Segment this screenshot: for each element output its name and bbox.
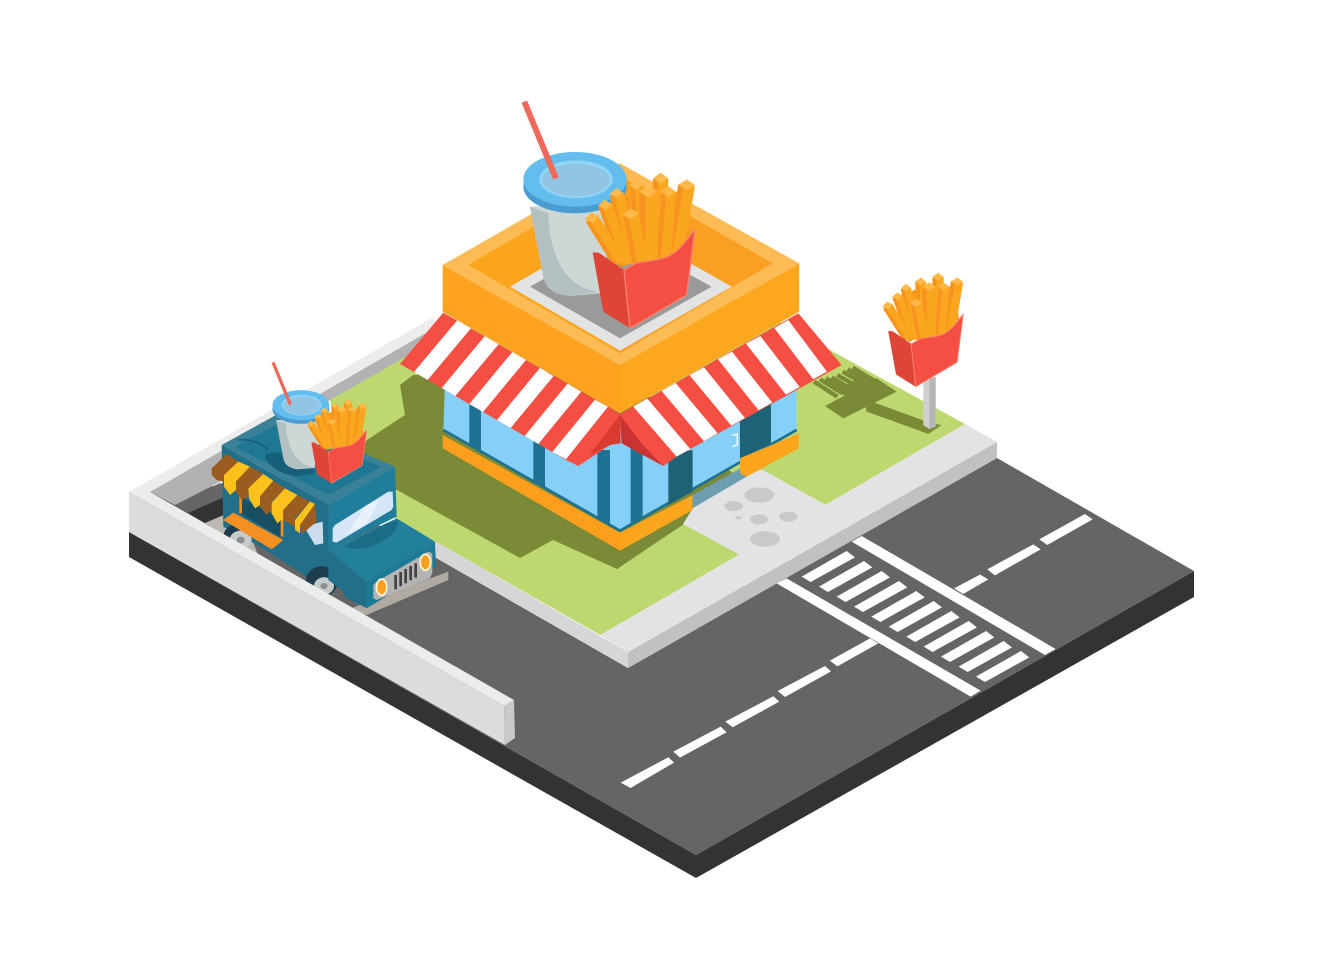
rooftop drink cup — [523, 102, 627, 296]
front wheel — [306, 566, 338, 597]
zebra crossing stripes — [802, 551, 1029, 682]
grass lawn — [330, 235, 965, 635]
right awning — [620, 313, 842, 466]
roof parapet back — [443, 163, 799, 365]
parking pad — [347, 572, 448, 615]
walkway — [683, 470, 826, 555]
back wall — [129, 318, 445, 560]
lot with sidewalk — [400, 424, 997, 668]
stop bars — [777, 536, 1056, 697]
restaurant building — [400, 102, 842, 551]
road markings — [621, 514, 1093, 788]
road base — [129, 458, 1194, 878]
sign pole — [923, 377, 936, 429]
truck awning — [212, 454, 317, 534]
orange base — [443, 433, 799, 551]
fries sign — [814, 273, 963, 434]
sign shadow — [814, 368, 942, 434]
service hatch — [223, 497, 283, 549]
centre line dashes — [621, 514, 1093, 788]
left awning — [400, 313, 621, 466]
parapet front faces — [443, 263, 799, 413]
food truck — [212, 362, 448, 615]
truck hood — [328, 518, 436, 608]
rooftop fries — [585, 173, 695, 328]
front wall — [129, 492, 515, 745]
sign fries box — [882, 273, 963, 387]
truck fries — [307, 399, 367, 483]
truck drink cup — [272, 362, 329, 469]
side window — [304, 522, 323, 545]
truck grille — [373, 552, 432, 600]
cab front and windshield — [328, 467, 397, 550]
rear wheel — [223, 524, 252, 549]
building shadow — [340, 370, 740, 569]
truck body side — [222, 445, 367, 608]
glass walls — [443, 383, 797, 531]
truck roof — [222, 415, 395, 505]
